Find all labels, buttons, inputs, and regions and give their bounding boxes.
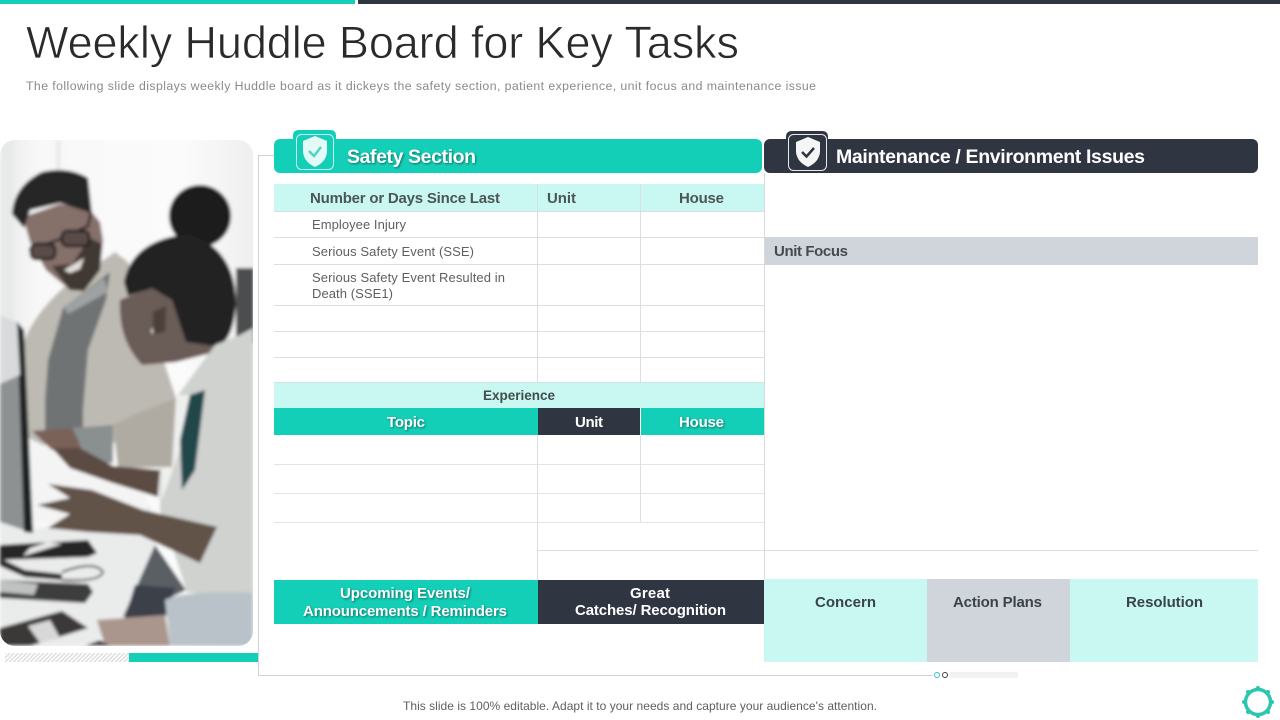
footer note: This slide is 100% editable. Adapt it to your needs and capture your audience's attention. [403, 699, 877, 713]
panel: action plans [927, 579, 1070, 662]
panel: great catches: Catches/ Recognition [575, 602, 726, 619]
panel: great catches [538, 580, 764, 624]
panel: upcoming events: Upcoming Events/ [340, 585, 471, 602]
panel: resolution: Resolution [1126, 594, 1203, 611]
table: safety section: Number or Days Since Last [310, 190, 500, 207]
table: experience [274, 382, 1258, 580]
panel: action plans: Action Plans [953, 594, 1042, 611]
panel: safety section header [274, 130, 762, 173]
table: safety section: Unit [547, 190, 576, 207]
table: safety section: Serious Safety Event Resulted in [312, 270, 505, 285]
panel: resolution [1070, 579, 1258, 662]
panel: great catches: Great [630, 585, 670, 602]
panel: upcoming events: Announcements / Reminders [303, 603, 507, 620]
table: safety section: Death (SSE1) [312, 286, 393, 301]
decorative bar under photo [5, 653, 258, 662]
panel: unit focus: Unit Focus [774, 243, 848, 260]
icon: maintenance shield [786, 131, 828, 170]
table: experience: Topic [387, 414, 425, 431]
icon: gear [1242, 686, 1274, 718]
panel: concern: Concern [815, 594, 876, 611]
column divider [764, 173, 766, 580]
top accent bar [0, 0, 1280, 4]
table: experience: Experience [483, 388, 555, 403]
subtitle: The following slide displays weekly Huddle board as it dickeys the safety section, patient experience, unit focus and maintenance issue [26, 79, 816, 93]
panel: safety section header: Safety Section [347, 146, 476, 168]
panel: unit focus [764, 237, 1258, 265]
table: safety section: Employee Injury [312, 217, 406, 232]
pagination dots [934, 672, 1018, 678]
photo: two colleagues at a desk [0, 130, 260, 650]
table: experience: House [679, 414, 724, 431]
panel: maintenance header: Maintenance / Environment Issues [836, 146, 1145, 168]
title: Weekly Huddle Board for Key Tasks [26, 17, 739, 68]
table: safety section: Serious Safety Event (SSE) [312, 244, 474, 259]
table: safety section: House [679, 190, 724, 207]
icon: safety shield [293, 130, 336, 170]
panel: concern [764, 579, 927, 662]
panel: upcoming events [274, 580, 538, 624]
table: safety section [274, 184, 765, 382]
outer frame [258, 156, 933, 676]
panel: maintenance header [764, 131, 1258, 173]
table: experience: Unit [575, 414, 603, 431]
